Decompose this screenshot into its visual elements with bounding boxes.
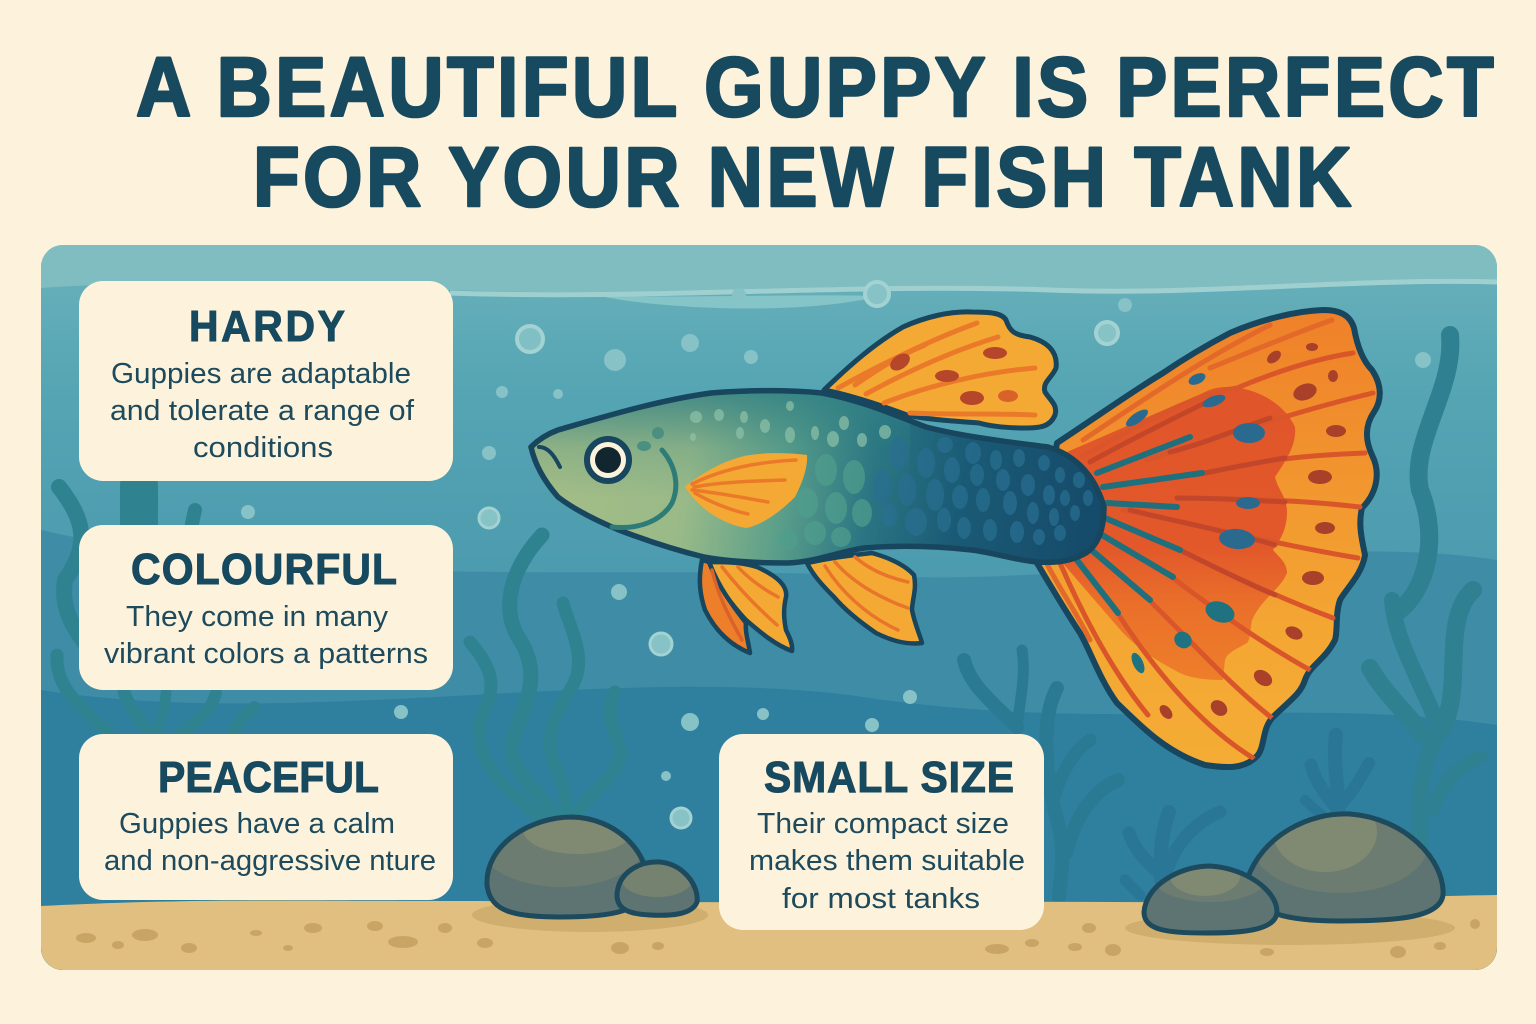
card: hardy: HARDY — [189, 303, 345, 351]
tail rays — [1045, 320, 1373, 758]
water surface — [41, 245, 1497, 292]
rock shadows — [472, 905, 1455, 945]
gill line — [612, 450, 676, 528]
tail fin — [1037, 310, 1380, 767]
card: small size: makes them suitable — [749, 845, 1025, 877]
card: hardy: Guppies are adaptable — [111, 358, 411, 390]
tail inner colour patch — [1060, 387, 1295, 680]
water depth bands — [41, 530, 1497, 970]
title: A BEAUTIFUL GUPPY IS PERFECT — [136, 41, 1494, 135]
panel: aquarium scene — [41, 245, 1497, 970]
seaweed base behind card — [159, 900, 288, 902]
rocks left — [484, 814, 700, 920]
card: small size: Their compact size — [757, 808, 1009, 840]
tail teal streaks — [1073, 437, 1202, 613]
rocks right — [1142, 811, 1446, 936]
scales — [873, 437, 1093, 545]
card: hardy: and tolerate a range of — [110, 395, 415, 427]
card: peaceful: and non-aggressive nture — [104, 845, 436, 877]
mouth — [539, 447, 560, 467]
card: small size: for most tanks — [782, 883, 980, 915]
bubbles — [241, 282, 1431, 828]
fish body — [530, 388, 1104, 563]
sand — [41, 895, 1497, 970]
card: peaceful: Guppies have a calm — [119, 808, 395, 840]
pectoral fin — [685, 453, 807, 528]
card: hardy — [79, 281, 453, 481]
tail spots — [1157, 343, 1346, 721]
ventral fins — [700, 553, 922, 653]
title: FOR YOUR NEW FISH TANK — [253, 131, 1351, 225]
water background — [41, 245, 1497, 970]
title — [136, 41, 1494, 225]
card: colourful: COLOURFUL — [131, 546, 397, 594]
card: colourful: vibrant colors a patterns — [104, 638, 428, 670]
eye — [587, 439, 629, 481]
seaweed: left and center — [57, 485, 621, 815]
card: hardy: conditions — [193, 432, 333, 464]
sand speckles — [76, 919, 1480, 958]
card: colourful — [79, 525, 453, 690]
card: small size: SMALL SIZE — [764, 754, 1014, 802]
seaweed: right side — [1370, 335, 1480, 860]
guppy — [530, 310, 1380, 767]
card: peaceful: PEACEFUL — [158, 754, 379, 802]
card: colourful: They come in many — [126, 601, 389, 633]
dorsal fin — [824, 312, 1056, 428]
card: small size — [719, 734, 1044, 930]
card: peaceful — [79, 734, 453, 900]
